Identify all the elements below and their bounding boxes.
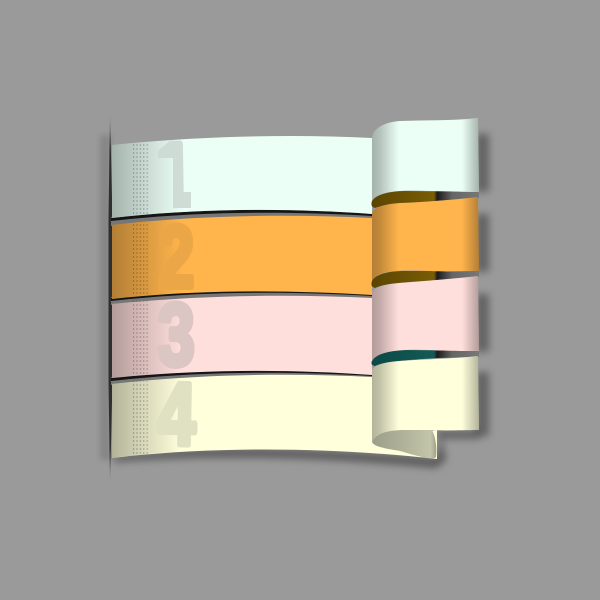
gap between panel 3 and 4 [371, 350, 479, 366]
ribbon 2 [112, 209, 372, 306]
right panel 1 [372, 118, 479, 201]
gap between panel 1 and 2 [371, 191, 479, 208]
number 2: 2 [158, 209, 194, 306]
ribbon 1 [112, 136, 372, 218]
number 3: 3 [158, 285, 195, 384]
dotted perforation [133, 144, 149, 216]
slit on left [108, 110, 112, 487]
gap between panel 2 and 3 [371, 271, 479, 288]
right panel 3 [372, 276, 479, 361]
dotted perforation [133, 381, 149, 454]
dotted perforation [133, 301, 149, 374]
ribbon 3 [112, 285, 372, 384]
left slit soft shadow [100, 135, 111, 460]
shadow below bottom ribbon [114, 436, 446, 468]
ribbon 4 [112, 365, 437, 464]
right panel 2 [372, 197, 479, 281]
infographic: numbered ribbon banners [100, 118, 493, 478]
right panel 4 [372, 356, 479, 442]
number 1: 1 [154, 125, 194, 224]
dark gaps between ribbons [111, 209, 372, 385]
number 4: 4 [157, 365, 197, 464]
fold under panel 4 [372, 430, 436, 458]
dotted perforation [133, 222, 149, 296]
shadows behind right panels [437, 134, 489, 439]
